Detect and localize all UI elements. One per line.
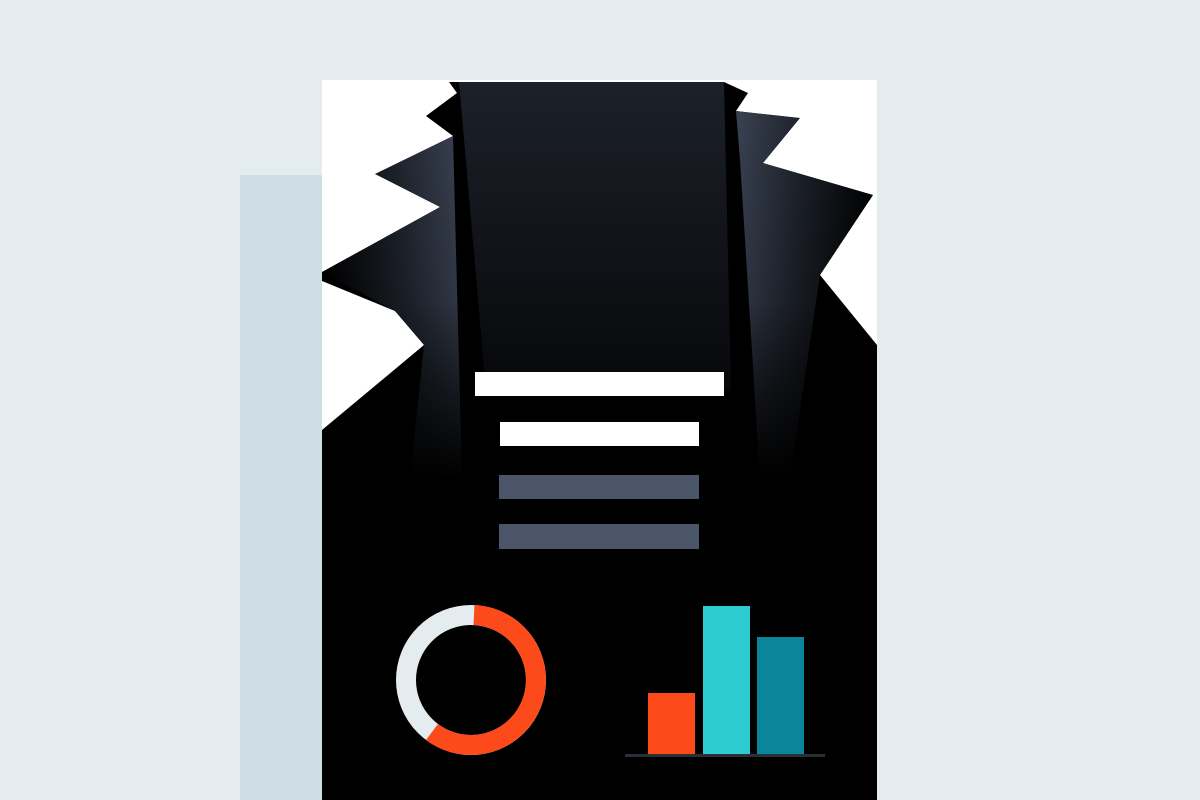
left flaps [322,136,462,478]
right flaps [736,111,873,478]
background panel [240,175,322,800]
bar chart [625,606,825,757]
paper [322,80,877,800]
torn hole [322,82,877,800]
inner dark column [459,82,731,391]
text lines [475,372,724,549]
illustration: torn document [240,80,877,800]
donut chart [406,615,536,745]
